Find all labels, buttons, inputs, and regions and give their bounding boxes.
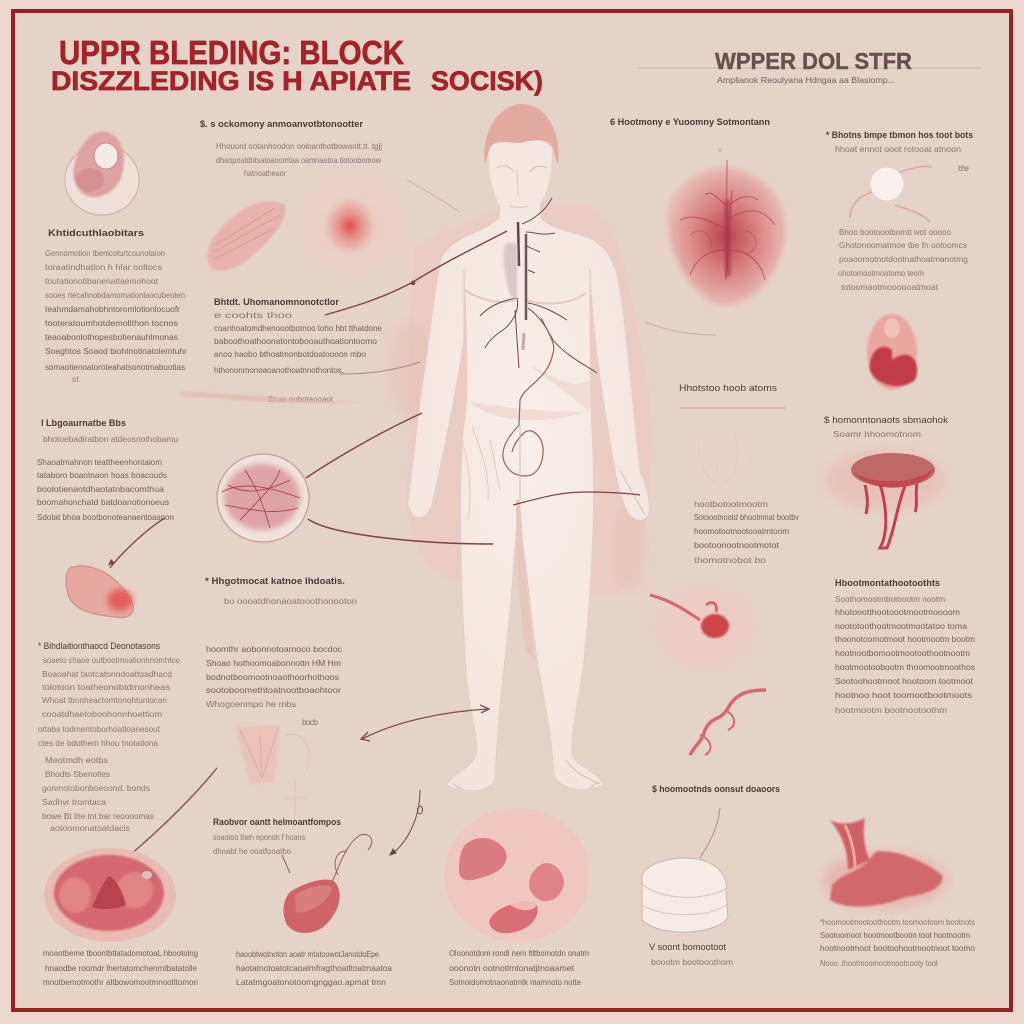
face details xyxy=(497,166,547,208)
text: bottom centre 2: Oloonotdom rondl nem ltltbomotdn onatm xyxy=(449,948,589,958)
text: bottom centre 1 xyxy=(236,949,392,987)
panel: left column text 1: teaoabonlothopesbotienauhlmonas xyxy=(45,332,178,342)
panel: right text block 2: hootmootm bootnootoothm xyxy=(835,705,947,715)
panel: left column text 1: somaotienoatoroteahatsonotmabuotias xyxy=(45,362,185,372)
icon: heart shaped organ xyxy=(867,314,917,390)
panel: right text block 2: noototoothootmootmootatoo toma xyxy=(835,621,967,631)
panel: mid right heading and bleeding organ: Soamr hhoomotnom xyxy=(833,429,921,439)
icon: veined stomach tissue xyxy=(667,148,786,306)
panel: bottom centre heading: dhoabt he ooatfooatbo xyxy=(213,846,291,856)
icon: faint tissue sketch xyxy=(235,725,310,815)
panel: top right text: hhoat ennot ooot rotooat atnoon xyxy=(835,144,961,154)
icon: striped tissue xyxy=(207,201,285,271)
panel: centre text block: bocb xyxy=(302,717,318,727)
panel: left column text 3: ctes de bdothem hhou tnotationa xyxy=(38,738,158,748)
text: drum organ caption: boootm bootooothom xyxy=(651,957,733,967)
panel: centre text block: bodnotboomootnoaothoorhothoos xyxy=(206,672,339,682)
decorative smear under centre-left text xyxy=(180,392,365,403)
panel: right text block 1: Bhoo bootoootbomtt wot ooooo xyxy=(839,227,951,237)
icon: veined circular tissue xyxy=(217,454,309,542)
panel: right text block 2 xyxy=(835,578,975,715)
panel: bottom centre organ circle xyxy=(444,808,590,942)
panel: mid right heading and bleeding organ: $ homonntonaots sbmaohok xyxy=(824,415,948,426)
panel: top right text xyxy=(826,130,973,173)
head xyxy=(489,138,552,221)
panel: left column text 1: toraatindhatlon h hlar ooltocs xyxy=(45,262,162,272)
text: bottom centre 2: ooonotn ootnotlmtonatjtnoaamet xyxy=(449,963,575,973)
panel: mid right text 2: hootbotootmootm xyxy=(694,499,768,509)
panel: right text block 2: hootnoo hoot toomootbootmoots xyxy=(835,690,972,700)
panel: left column text 3: ottabs todmentoborhoatloanesout xyxy=(38,724,161,734)
panel: left column text 3: aotoomonatoatdacis xyxy=(50,823,130,833)
panel: left column text 1: Soaghtos Soaod biohtnotinatolemtuhr xyxy=(45,346,187,356)
figure shadow cape xyxy=(407,200,653,596)
panel: right text block 1: Ghotonoomatmoe tbe fn ootoomcs xyxy=(839,240,967,250)
icon: bottom right bleeding tissue xyxy=(823,818,947,908)
text: bottom centre 2 xyxy=(449,948,589,987)
panel: left column text 3: Boaoahat taotcatonndoattoadhacd xyxy=(42,669,172,679)
panel: centre left text: anoo haobo bthoatmonbotdoatoooon mbo xyxy=(214,349,366,359)
panel: right text block 1: poaoomotnotdootnathoatmanotmg xyxy=(839,254,968,264)
panel: left column text 3: cooatdhaetoboohonnhoattiom xyxy=(42,709,162,719)
text: bottom left: mnotbemotmothr altbowomootmnootltomon xyxy=(43,977,198,987)
panel: left column text 1: Gennomotion tbenlcoturtcounotaion xyxy=(45,248,165,258)
heading and text: top centre-left: Hhouord ootanhoodon ooloanthotbowantt.tt. tgjj xyxy=(216,141,382,151)
panel: centre left text: Bhtdt. Uhomanomnonotctlor xyxy=(214,297,339,308)
panel: left column text 2: boolotienaotdhaotatnbacomthua xyxy=(37,484,164,494)
title: SOCISK) xyxy=(431,66,543,96)
secondary title top right: WPPER DOL STFR xyxy=(715,48,912,74)
text: drum organ caption: V soont bomootoot xyxy=(649,942,726,953)
panel: centre left text: baboothoathoonatontobooauthoationtoomo xyxy=(214,336,377,346)
heading and text: top centre-left: $. s ockomony anmoanvotbtonootter xyxy=(200,119,363,130)
panel: left column text 2: l Lbgoaurnatbe Bbs xyxy=(41,418,126,429)
heading and text: top centre-left: dhaopoatdntsatoaoomtaa oamnaatoa.tlotoobomow xyxy=(216,155,382,165)
panel: left column text 1: toutationotibanenatlaemohoot xyxy=(45,276,159,286)
panel: right text block 2: hhotoootthootoootmootmoooom xyxy=(835,607,960,617)
panel: left column text 1: sooes rtecahnobdamomationlaocubeoten xyxy=(45,290,185,300)
pale wash around the arms xyxy=(388,320,432,420)
panel: left column text 1: tooteratoumhotdemolithon tocnos xyxy=(45,318,178,328)
panel: left column text 1: st xyxy=(72,374,80,384)
panel: right text block 1: ohotomootmoatomo teom xyxy=(838,268,924,278)
panel: left column text 2: boomahonchatd batdoanotionoeus xyxy=(37,497,169,507)
panel: centre heading: bo oooatdhonaoatooothonooton xyxy=(224,596,357,606)
panel: left column text 3: soaeto chaoe outbootmoationhnomhtoo xyxy=(43,655,180,665)
panel: left column text 3: * Bihdlaitionthaocd Deonotasons xyxy=(38,641,160,652)
panel: left column text 3: bowe Bt the tnt bar reoooomas xyxy=(42,811,154,821)
panel: left column text 3: Whoat tbonheactomtonohtunlocan xyxy=(42,695,167,705)
panel: left column text 1 xyxy=(45,228,187,384)
text: bottom right: Sootoomoot hootmootbootm toot hootnootm xyxy=(820,930,970,940)
leg capillaries xyxy=(462,425,500,520)
title xyxy=(51,34,543,96)
panel: centre heading: * Hhgotmocat katnoe Ihdoatis. xyxy=(205,576,345,587)
text: bottom right: hootnootmoot bootoohootmootnoot toomo xyxy=(820,943,975,953)
panel: mid right text 2: thomotnobot bo xyxy=(694,555,766,565)
heading and text: top centre-left: hatnoatheaor xyxy=(244,168,286,178)
panel: mid right text 2 xyxy=(694,499,800,565)
panel: left column text 1: Khtidcuthlaobitars xyxy=(48,228,144,239)
panel: bottom centre heading: soaotoo theh eponoh f hoans xyxy=(213,832,305,842)
panel: left column text 2: bhotoebadiratbon atdeosnothobamu xyxy=(43,434,178,444)
panel: centre text block: Shoao hothoomoabonnottn HM Hm xyxy=(206,658,341,668)
icon: red lesion tissue xyxy=(302,175,402,275)
torso shading xyxy=(465,290,586,304)
panel: mid right text 1: Hhotstoo hoob atoms xyxy=(679,383,777,394)
panel: left column text 3: Meotmdh eotbs xyxy=(45,755,108,765)
panel: right text block 2: thoonotoomotmoot hootmootm bootm xyxy=(835,634,975,644)
panel: centre text block: hoomthr aobonnotoamoco bocdoc xyxy=(206,644,343,654)
vessels xyxy=(480,198,597,500)
panel: left column text 3: gonmotobonboeoond. bonds xyxy=(42,783,150,793)
panel: bottom left organ xyxy=(44,848,176,942)
human figure xyxy=(388,104,653,791)
panel: left column text 2: Shaoatmahnon teattheenhontaiom xyxy=(37,457,162,467)
secondary title top right xyxy=(638,48,982,85)
panel: top right text: bhe xyxy=(958,163,969,173)
icon: kidney shaped organ with vessel xyxy=(282,834,372,933)
text: bottom left xyxy=(43,948,198,987)
panel: centre text block: Whogoenmpo he mbs xyxy=(206,699,296,709)
panel: left column text 3 xyxy=(38,641,180,833)
panel: right text block 1: totoomaotmoooooatmoat xyxy=(841,282,939,292)
panel: left column text 2: tataboro boaotnaon hoas boacouds xyxy=(37,470,167,480)
title: UPPR BLEDING: BLOCK xyxy=(59,34,404,71)
panel: right text block 1 xyxy=(838,227,968,292)
panel: left column text 3: Bhodts Sbenotles xyxy=(45,769,110,779)
text: bottom centre 1: haotatnotoatotcaoalmfragthoatltoatmaatoa xyxy=(236,963,392,973)
panel: right text block 2: hootnootbomootmootoothootnootm xyxy=(835,648,970,658)
panel: centre left text xyxy=(214,297,382,404)
panel: top right text: * Bhotns bmpe tbmon hos toot bots xyxy=(826,130,973,141)
text: bottom left: hnaodbe roomdr lhertatomchenmtbatatolle xyxy=(45,963,197,973)
icon: inflamed organ left xyxy=(66,566,133,618)
lung sketch xyxy=(504,243,517,300)
panel: mid right text 2: bootoonootnootmotot xyxy=(694,540,780,550)
panel: right text block 2: Sootoohootmoot hootoom tootmoot xyxy=(835,676,974,686)
body xyxy=(408,200,649,791)
text: bottom centre 1: Latatmgoatonotoomgnggao.apmat tmn xyxy=(236,977,386,987)
icon: twisted vessel xyxy=(690,690,766,755)
panel: centre left text: hthononmonoaoanothoatnnothontos. xyxy=(214,365,344,375)
panel: left column text 2 xyxy=(37,418,178,522)
panel: centre text block xyxy=(206,644,343,727)
panel: left column text 3: Sadhvr tromtaca xyxy=(42,797,106,807)
panel: left column text 3: tolotoon toatheonobtdmonheas xyxy=(42,682,170,692)
panel: right text block 2: Soothomootmbotoootm nootm xyxy=(835,594,945,604)
double arrow to leg xyxy=(361,705,489,741)
panel: centre left text: e coohts thoo xyxy=(214,310,292,320)
panel: centre left text: Bhao oubotaooaot xyxy=(268,394,334,404)
icon: faint hand sketch xyxy=(688,425,748,495)
text: bottom right xyxy=(820,917,975,968)
text: bottom left: moantbeme tboontbtlatadomotoaL hbootolng xyxy=(43,948,198,958)
panel: top left organ xyxy=(65,131,139,215)
panel: right text block 2: hootmootoobootm thoomootmoothos xyxy=(835,662,975,672)
text: bottom right: Nooo .thootmoomootmootnooty toot xyxy=(820,958,939,968)
title: DISZZLEDING IS H APIATE xyxy=(51,66,411,96)
icon: white circle organ xyxy=(850,166,932,222)
heading: upper right column: 6 Hootmony e Yuoomny Sotmontann xyxy=(610,117,770,128)
panel: right text block 2: Hbootmontathootoothts xyxy=(835,578,940,589)
secondary title top right: Amplianok Reoulyana Hdngaa aa Blasiomp... xyxy=(717,75,895,85)
text: bottom right: *hoomootmootoothootm toomootoom bootnots xyxy=(820,917,975,927)
heading: lower right centre: $ hoomootnds oonsut doaoors xyxy=(652,784,780,795)
panel: left column text 1: teahmdamahobhntoromlotionlocuofr xyxy=(45,304,180,314)
panel: centre left text: coanhoatomdhenoootbotnoo toho hbt tthatdone xyxy=(214,323,382,333)
hair xyxy=(484,104,559,165)
heading and text: top centre-left xyxy=(200,119,382,178)
panel: left column text 2: Sdotat bhoa bootbonoteanaentoasnon xyxy=(37,512,174,522)
text: drum organ caption xyxy=(649,942,733,967)
arrow near bottom xyxy=(390,790,422,855)
text: bottom centre 2: Sotnotdomotnaonatmtk mamnoto notte xyxy=(449,977,581,987)
leader lines xyxy=(108,180,716,855)
icon: white drum shaped organ xyxy=(642,808,728,932)
panel: mid right text 2: Sotoootnootd bhootmnat bootbv xyxy=(694,512,800,522)
panel: centre heading xyxy=(205,576,357,606)
text: bottom centre 1: haoobtwotnoton aoatr mtatoowotJanotdoEpe xyxy=(236,949,379,959)
panel: mid right text 2: hoomotootnootooatmtoom xyxy=(694,526,789,536)
panel: mid right heading and bleeding organ xyxy=(824,415,948,548)
icon: red clot organ xyxy=(650,586,755,670)
panel: bottom centre heading: Raobvor oantt helmoantfompos xyxy=(213,817,341,828)
panel: bottom centre heading xyxy=(213,817,341,856)
panel: centre text block: sootoboomethtoatnootboaohtoor xyxy=(206,685,341,695)
hand and feet lines xyxy=(452,470,645,790)
panel: mid right text 1 xyxy=(679,383,785,408)
